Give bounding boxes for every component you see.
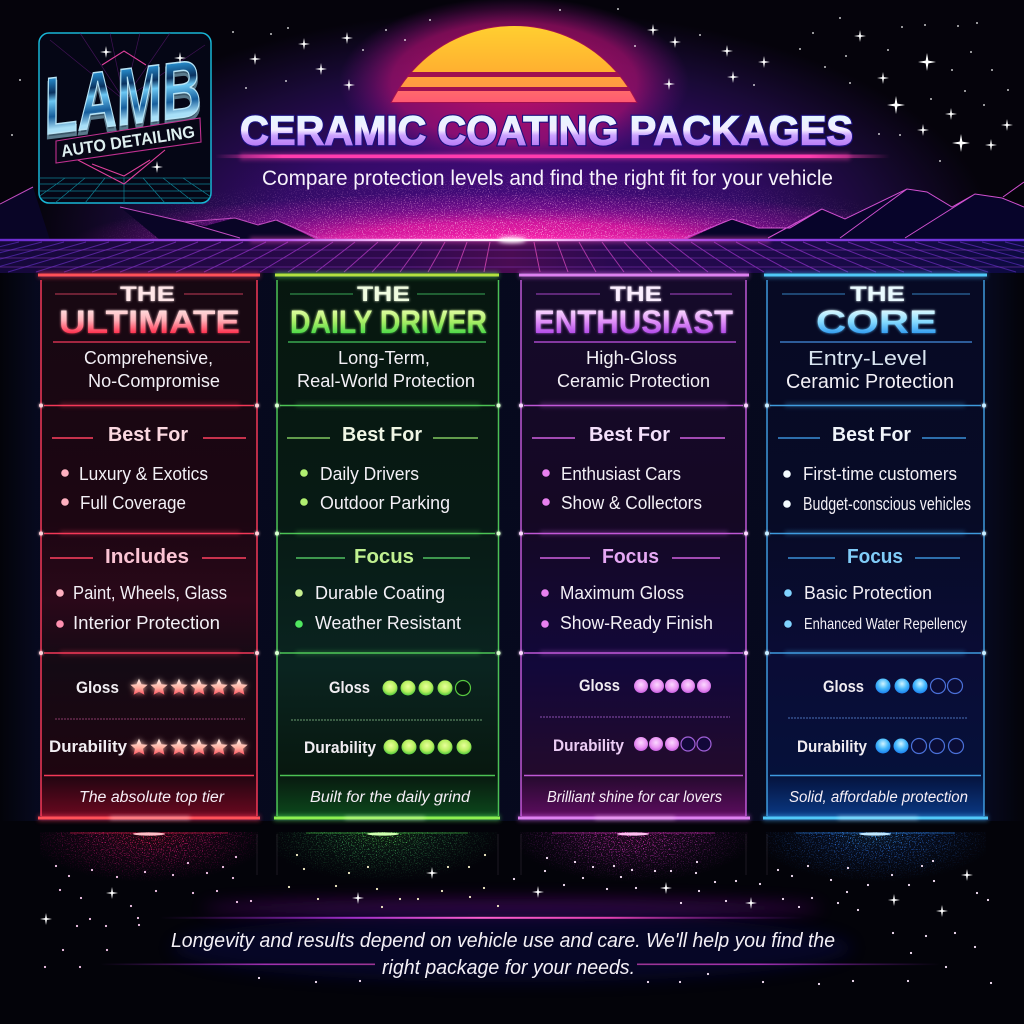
description: Ceramic Protection	[557, 371, 710, 391]
heading	[780, 283, 972, 342]
sky glow	[0, 0, 1024, 242]
tagline: Built for the daily grind	[310, 789, 471, 806]
logo wordmark	[46, 61, 200, 140]
logo wordmark: LAMB	[38, 43, 206, 151]
description: Long-Term,	[338, 348, 430, 368]
subtitle: Compare protection levels and find the right fit for your vehicle	[262, 166, 833, 190]
focus: Focus	[602, 546, 659, 568]
focus: Maximum Gloss	[560, 583, 684, 603]
description	[84, 348, 220, 391]
logo subtitle: AUTO DETAILING	[60, 122, 196, 161]
best for	[287, 424, 478, 513]
logo sparkles	[174, 52, 186, 64]
ratings	[788, 677, 968, 756]
tagline: Brilliant shine for car lovers	[547, 789, 722, 806]
panel: the daily driver	[274, 275, 500, 819]
focus: Focus	[354, 546, 414, 568]
footer note	[171, 930, 835, 979]
focus: Basic Protection	[804, 583, 932, 603]
title: CERAMIC COATING PACKAGES	[240, 108, 853, 154]
logo diamond	[74, 51, 165, 184]
ratings	[49, 678, 248, 756]
sun halo	[330, 0, 700, 170]
heading: THE	[357, 283, 410, 306]
icon: sun	[390, 26, 638, 103]
best for: Outdoor Parking	[320, 493, 450, 513]
ratings: Durability	[553, 736, 624, 755]
heading	[534, 283, 736, 342]
focus	[784, 546, 967, 633]
description: No-Compromise	[88, 371, 220, 391]
description	[786, 348, 954, 393]
heading: THE	[120, 283, 175, 306]
heading	[53, 283, 250, 342]
best for: Enthusiast Cars	[561, 464, 681, 484]
panel: the enthusiast	[518, 275, 750, 819]
grid floor	[0, 240, 1024, 273]
horizon glow	[0, 185, 1024, 241]
best for: Luxury & Exotics	[79, 464, 208, 484]
focus: Durable Coating	[315, 583, 445, 603]
includes: Paint, Wheels, Glass	[73, 583, 227, 603]
ratings: Durability	[304, 738, 376, 757]
heading: ULTIMATE	[59, 304, 240, 340]
panel frame	[38, 275, 260, 819]
description: High-Gloss	[586, 348, 677, 368]
panel frame	[763, 275, 988, 819]
star field: sky	[12, 9, 1013, 240]
best for: Best For	[342, 424, 422, 446]
logo wordmark: LAMB	[38, 47, 206, 155]
description	[297, 348, 475, 391]
title: CERAMIC COATING PACKAGES	[240, 108, 853, 154]
mountains: left	[0, 187, 318, 240]
heading: THE	[850, 283, 905, 306]
best for: Full Coverage	[80, 493, 186, 513]
ratings: Durability	[49, 737, 128, 756]
ratings	[291, 678, 483, 757]
best for	[52, 424, 246, 513]
focus	[295, 546, 470, 633]
includes: Includes	[105, 546, 189, 568]
best for: Best For	[108, 424, 188, 446]
panel: the core	[763, 275, 988, 819]
best for: Budget-conscious vehicles	[803, 494, 971, 514]
footer rules	[100, 917, 940, 965]
heading	[288, 283, 487, 342]
ratings	[540, 676, 730, 755]
best for	[778, 424, 971, 514]
logo rays	[50, 33, 205, 100]
tagline: Solid, affordable protection	[789, 789, 968, 806]
ratings: Gloss	[579, 676, 620, 695]
heading: ENTHUSIAST	[534, 304, 733, 340]
title rule	[215, 153, 890, 160]
includes	[50, 546, 246, 633]
footer note: right package for your needs.	[382, 957, 635, 979]
includes: Interior Protection	[73, 613, 220, 633]
best for: First-time customers	[803, 464, 957, 484]
logo banner	[56, 118, 201, 163]
footer note: Longevity and results depend on vehicle use and care. We'll help you find the	[171, 930, 835, 952]
logo badge	[30, 33, 220, 203]
best for: Daily Drivers	[320, 464, 419, 484]
description: Entry-Level	[808, 348, 927, 370]
focus: Focus	[847, 546, 903, 568]
reflections	[40, 832, 986, 884]
panel frame	[518, 275, 750, 819]
description: Ceramic Protection	[786, 371, 954, 393]
best for: Show & Collectors	[561, 493, 702, 513]
mountains: right	[685, 182, 1024, 240]
description: Real-World Protection	[297, 371, 475, 391]
star field: bottom	[40, 855, 991, 984]
best for: Best For	[832, 424, 911, 446]
ratings: Gloss	[329, 678, 370, 697]
best for	[532, 424, 725, 513]
focus: Show-Ready Finish	[560, 613, 713, 633]
focus	[540, 546, 720, 633]
panel: the ultimate	[38, 275, 260, 819]
horizon line	[0, 237, 1024, 243]
focus: Weather Resistant	[315, 613, 461, 633]
ratings: Gloss	[76, 678, 119, 697]
heading: DAILY DRIVER	[290, 304, 487, 340]
description: Comprehensive,	[84, 348, 213, 368]
best for: Best For	[589, 424, 670, 446]
focus: Enhanced Water Repellency	[804, 616, 967, 633]
panel backdrop	[0, 273, 1024, 821]
ratings: Durability	[797, 737, 867, 756]
description	[557, 348, 710, 391]
footer glow	[172, 899, 852, 982]
heading: CORE	[816, 304, 937, 340]
heading: THE	[610, 283, 662, 306]
ratings: Gloss	[823, 677, 864, 696]
panel frame	[274, 275, 500, 819]
logo grid floor	[30, 178, 220, 203]
tagline: The absolute top tier	[79, 789, 225, 806]
